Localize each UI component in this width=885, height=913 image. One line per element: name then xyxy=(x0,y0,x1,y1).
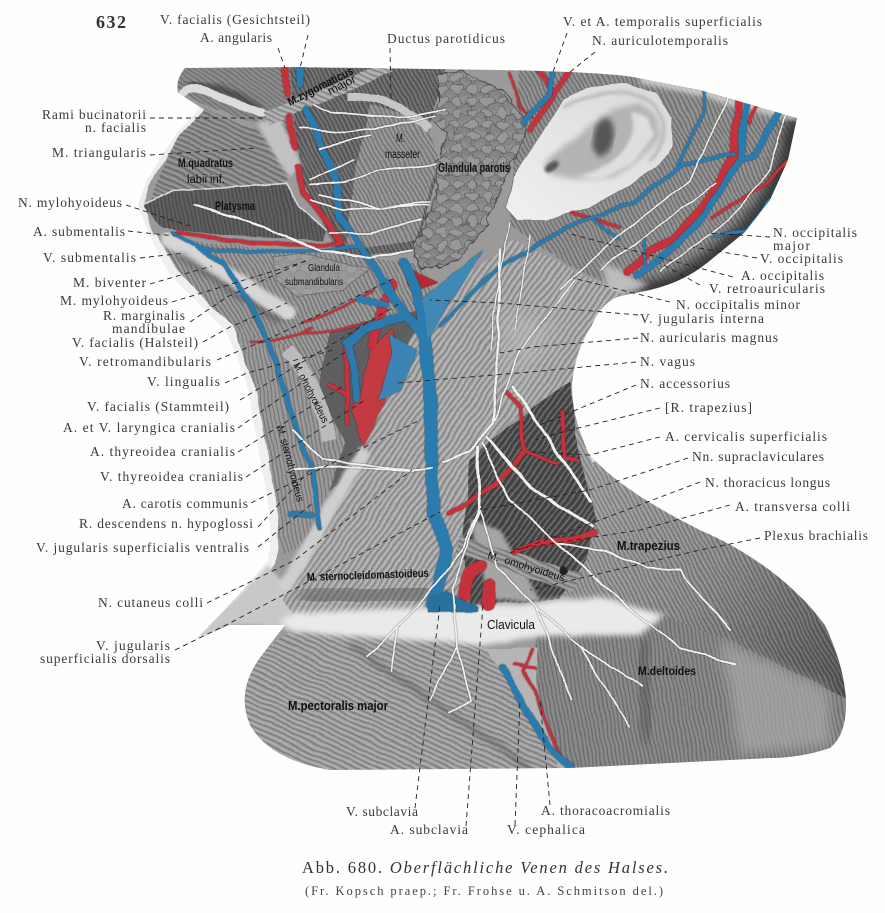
label: M.: M. xyxy=(396,133,405,145)
label: M. quadratus: M.quadratus xyxy=(178,158,233,170)
vein: upper tributaries xyxy=(383,263,423,335)
artery: behind parotid xyxy=(405,268,438,290)
nerve: supraclavicular thick branches xyxy=(477,387,593,527)
muscle fibres: quadratus xyxy=(150,107,293,200)
panel: area behind the ear xyxy=(510,70,797,295)
label: A. occipitalis: A. occipitalis xyxy=(741,268,824,283)
panel: upper face xyxy=(178,67,310,136)
vein: V. subclavia xyxy=(428,592,478,612)
label: Platysma: Platysma xyxy=(215,201,255,213)
label: M. omohyoideus vertical: M. omohyoideus xyxy=(290,361,331,425)
label: masseter: masseter xyxy=(385,149,420,161)
label: M. mylohyoideus: M. mylohyoideus xyxy=(60,293,168,308)
vein: lingual wedge xyxy=(378,335,418,400)
label: A. cervicalis superficialis: A. cervicalis superficialis xyxy=(665,429,827,444)
nerve: N. cutaneus colli xyxy=(290,430,432,470)
label: A. thyreoidea: A. thyreoidea cranialis xyxy=(90,444,235,459)
artery: laryngeal branches xyxy=(250,290,373,343)
labels: bottom xyxy=(346,803,670,837)
nerve: N. auricularis magnus xyxy=(443,250,500,463)
panel: veins xyxy=(173,68,780,767)
label: R. marginalis: R. marginalis xyxy=(103,308,185,323)
vein: V. temporalis superficialis xyxy=(523,70,553,123)
muscle: M. quadratus labii inferioris xyxy=(150,107,293,200)
label: M. sternohyoideus: M. sternohyoideus xyxy=(274,425,306,503)
label: N. occipitalis: N. occipitalis xyxy=(773,225,857,240)
muscle: M. zygomaticus major xyxy=(263,64,393,126)
label: A. subclavia: A. subclavia xyxy=(390,822,468,837)
label: R. trapezius: [R. trapezius] xyxy=(665,400,752,415)
label: A. transversa colli: A. transversa colli xyxy=(735,499,850,514)
label: major: major xyxy=(773,238,810,253)
label: N. occipitalis minor: N. occipitalis minor xyxy=(676,297,800,312)
label: N. accessorius: N. accessorius xyxy=(640,376,730,391)
panel: arteries xyxy=(177,68,788,757)
label: superficialis dorsalis: superficialis dorsalis xyxy=(40,651,170,666)
panel: nerves xyxy=(195,95,785,727)
vein: V. facialis xyxy=(300,68,383,283)
skin edge of the face xyxy=(138,107,200,237)
artery: facial neck branch xyxy=(330,345,348,423)
artery: A. angularis and facialis xyxy=(285,68,340,243)
label: V. jugularis ventralis: V. jugularis superficialis ventralis xyxy=(36,540,249,555)
artery: carotis externa stump xyxy=(372,285,392,345)
label: V. facialis Gesichtsteil: V. facialis (Gesichtsteil) xyxy=(160,12,310,27)
label: V. lingualis: V. lingualis xyxy=(147,374,220,389)
label: N. vagus: N. vagus xyxy=(640,354,695,369)
body base tone xyxy=(130,60,850,775)
vein: V. jugularis externa xyxy=(423,313,447,604)
vein: V. facialis Stammteil xyxy=(347,317,403,343)
skin flap at lower neck xyxy=(198,566,292,638)
label: M. sternocleidomastoideus: M. sternocleidomastoideus xyxy=(307,568,429,584)
panel: region under the jaw xyxy=(159,232,434,382)
label: V. submentalis: V. submentalis xyxy=(43,250,136,265)
label: Rami bucinatorii: Rami bucinatorii xyxy=(42,107,146,122)
vein: occipital branches xyxy=(593,87,770,275)
label: Plexus brachialis: Plexus brachialis xyxy=(764,528,868,543)
panel: neck front strap muscles xyxy=(150,237,345,640)
artery: A. submentalis xyxy=(177,232,340,245)
label: V. jugularis interna: V. jugularis interna xyxy=(640,311,764,326)
vein: V. lingualis xyxy=(347,298,385,400)
labels: top xyxy=(160,12,762,48)
nerve: Nn. supraclaviculares xyxy=(367,507,643,727)
ear xyxy=(507,83,673,220)
label: V. et A. temporalis: V. et A. temporalis superficialis xyxy=(563,14,762,29)
label: N. cutaneus colli: N. cutaneus colli xyxy=(98,595,203,610)
panel: posterior triangle xyxy=(455,380,597,605)
nerve: occipital branches xyxy=(495,95,785,420)
artery: A. temporalis superficialis xyxy=(530,70,570,130)
label: V. occipitalis: V. occipitalis xyxy=(760,251,843,266)
label: M. pectoralis major: M.pectoralis major xyxy=(288,698,388,713)
label: V. facialis Stammteil: V. facialis (Stammteil) xyxy=(87,399,229,414)
muscle: M. pectoralis major xyxy=(245,632,572,770)
label: Glandula: Glandula xyxy=(308,263,340,274)
artery: A. cervicalis superficialis xyxy=(448,452,523,513)
label: Ductus parotidicus: Ductus parotidicus xyxy=(387,31,505,46)
gland: Glandula submandibularis xyxy=(273,253,370,297)
muscle: M. trapezius xyxy=(564,414,846,698)
label: V. thyreoidea: V. thyreoidea cranialis xyxy=(100,469,243,484)
artery: A. thoracoacromialis xyxy=(514,650,563,757)
vein: V. jugularis superficialis ventralis xyxy=(197,247,320,527)
label: V. retromandibularis: V. retromandibularis xyxy=(79,354,211,369)
label: A. angularis: A. angularis xyxy=(200,30,272,45)
label: major muscle: major xyxy=(326,73,358,98)
leader lines xyxy=(126,33,770,826)
artery: cervical branches xyxy=(508,393,577,463)
label: A. et V. laryngica: A. et V. laryngica cranialis xyxy=(63,420,235,435)
label: V. retroauricularis: V. retroauricularis xyxy=(709,281,825,296)
label: N. thoracicus longus: N. thoracicus longus xyxy=(705,475,830,490)
gland: Glandula parotis xyxy=(413,70,527,267)
label: M. deltoides: M.deltoides xyxy=(638,666,696,678)
deltopectoral triangle xyxy=(486,648,570,768)
nerve: postauricular fibres xyxy=(490,222,530,350)
nerve: lateral supraclavicular xyxy=(482,443,735,665)
artery: A. subclavia xyxy=(465,566,490,605)
label: M. trapezius: M.trapezius xyxy=(617,538,680,553)
artery: temporal thin branch xyxy=(510,72,532,118)
vein: V. retroauricularis trunk xyxy=(440,155,733,325)
parotid duct xyxy=(347,97,430,130)
label: V. cephalica: V. cephalica xyxy=(507,822,585,837)
caption: Abb. 680. Oberflächliche Venen des Halses. xyxy=(302,858,668,877)
vein: V. submentalis xyxy=(173,233,357,252)
artery: occipital branches xyxy=(573,103,788,227)
label: Glandula parotis: Glandula parotis xyxy=(438,160,510,175)
label: A. thoracoacromialis: A. thoracoacromialis xyxy=(541,803,670,818)
light muscle at mouth corner xyxy=(256,118,300,178)
label: labii inf.: labii inf. xyxy=(187,174,225,186)
caption credit: (Fr. Kopsch praep.; Fr. Frohse u. A. Schmitson del.) xyxy=(305,884,663,898)
artery: A. occipitalis xyxy=(627,97,740,273)
label: V. facialis Halsteil: V. facialis (Halsteil) xyxy=(72,335,198,350)
muscle: M. sternocleidomastoideus xyxy=(283,240,625,618)
label: N. auriculotemporalis: N. auriculotemporalis xyxy=(592,33,728,48)
bone: Clavicula xyxy=(280,597,665,645)
labels: right xyxy=(640,225,868,543)
artery: A. transversa colli xyxy=(515,533,595,553)
label: A. submentalis: A. submentalis xyxy=(33,224,125,239)
label: M. biventer: M. biventer xyxy=(73,275,146,290)
label: n. facialis: n. facialis xyxy=(85,120,146,135)
nerve: N. cutaneus colli upper branch xyxy=(195,205,412,258)
label: M. triangularis: M. triangularis xyxy=(52,145,146,160)
vein: V. jugularis interna patch xyxy=(423,250,483,340)
nerve: facial branches xyxy=(300,105,445,233)
label: M. omohyoideus clavicular: M. omohyoideus xyxy=(486,549,566,584)
label: submandibularis: submandibularis xyxy=(285,277,343,288)
label: N. mylohyoideus: N. mylohyoideus xyxy=(18,195,122,210)
dark area beside carotid xyxy=(319,310,417,492)
vein: V. cephalica xyxy=(503,667,570,767)
label: V. subclavia: V. subclavia xyxy=(346,804,418,819)
label: N. auricularis magnus: N. auricularis magnus xyxy=(640,330,778,345)
muscle: M. omohyoideus xyxy=(456,536,582,592)
anatomical illustration xyxy=(130,60,850,775)
panel: cheek and masseter xyxy=(290,68,445,258)
labels on the illustration xyxy=(178,65,696,713)
label: M. zygomaticus: M.zygomaticus xyxy=(286,65,356,109)
label: R. descendens: R. descendens n. hypoglossi xyxy=(79,516,253,531)
muscle: M. deltoides xyxy=(535,615,850,770)
label: mandibulae: mandibulae xyxy=(112,321,185,336)
page number: 632 xyxy=(96,12,126,32)
label: Nn. supraclaviculares: Nn. supraclaviculares xyxy=(692,449,824,464)
label: Clavicula: Clavicula xyxy=(487,617,536,632)
labels: left xyxy=(18,107,253,666)
label: A. carotis communis: A. carotis communis xyxy=(122,496,248,511)
label: V. jugularis: V. jugularis xyxy=(96,638,170,653)
artery: A. carotis communis xyxy=(352,330,398,447)
muscle: Platysma xyxy=(140,183,327,240)
vein: V. occipitalis xyxy=(637,97,780,275)
